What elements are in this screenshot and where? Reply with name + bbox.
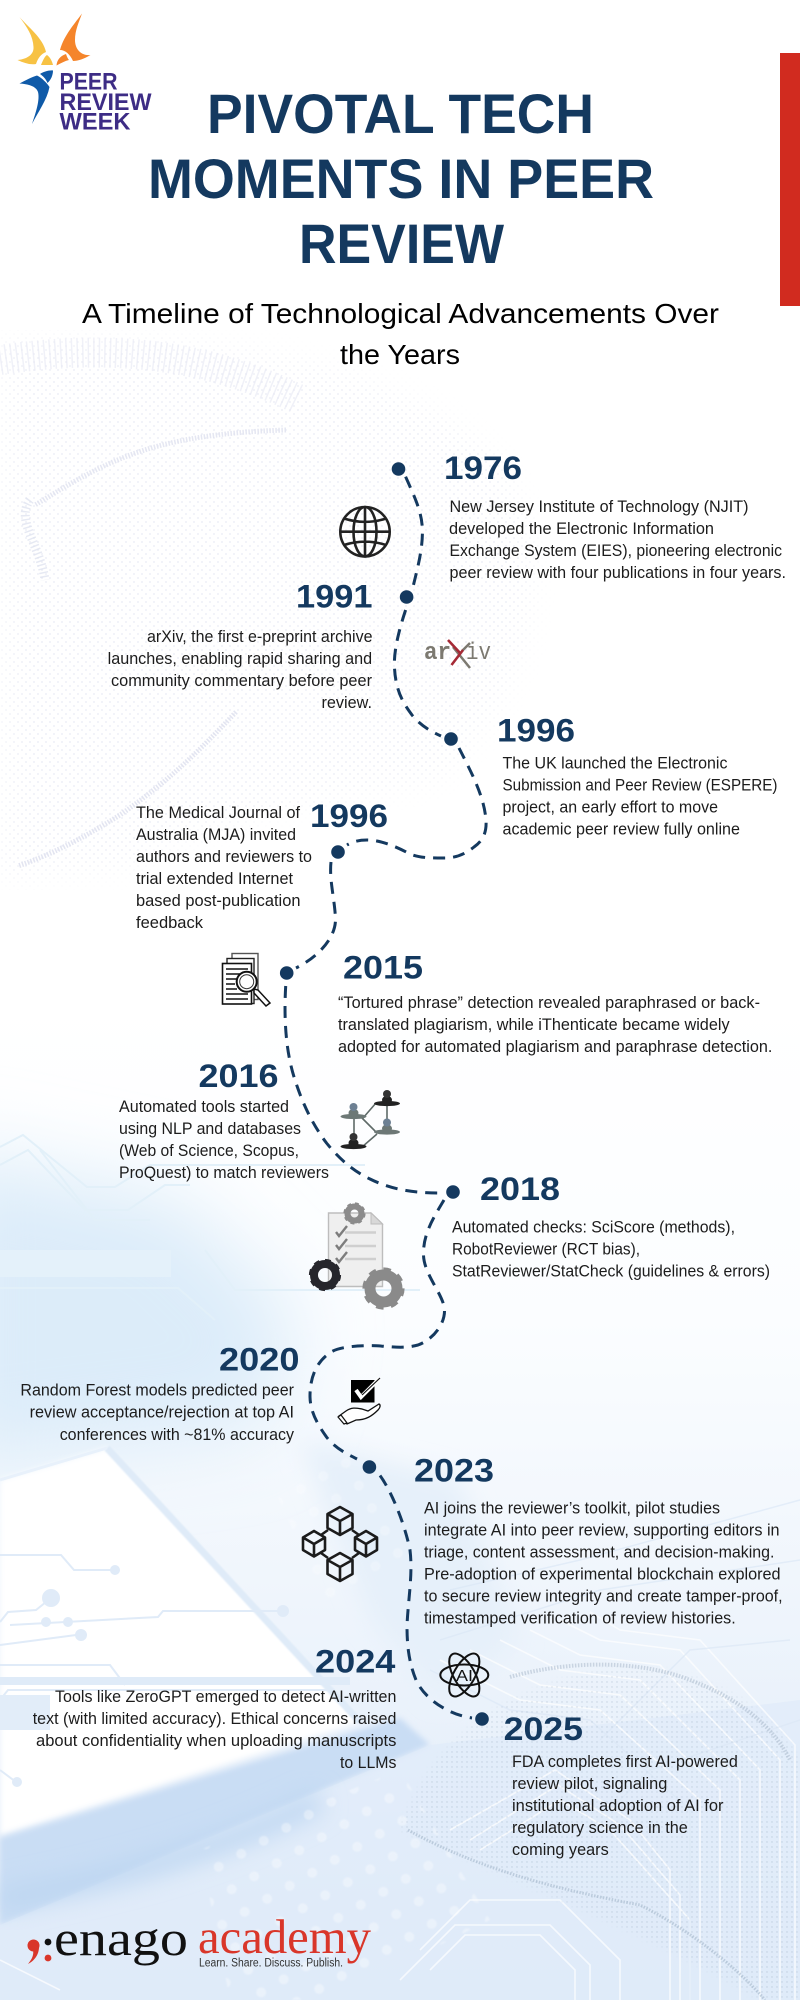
description 2016 xyxy=(119,1098,329,1182)
description 1991: launches, enabling rapid sharing and xyxy=(108,650,372,668)
year 2024: 2024 xyxy=(315,1644,396,1680)
description 2025: regulatory science in the xyxy=(512,1819,688,1837)
description 2018: Automated checks: SciScore (methods), xyxy=(452,1219,735,1237)
icon: blockchain cubes xyxy=(303,1507,377,1581)
description 1996 MJA: The Medical Journal of xyxy=(136,804,300,822)
description 2024: about confidentiality when uploading manuscripts xyxy=(36,1732,396,1750)
panel: 1991 xyxy=(108,579,372,712)
year 1996: 1996 xyxy=(497,713,575,749)
panel: 2020 xyxy=(20,1342,300,1444)
year 2015: 2015 xyxy=(343,950,423,986)
description 2015: translated plagiarism, while iThenticate became widely xyxy=(338,1016,730,1034)
icon: arXiv logo: ar xyxy=(424,640,451,667)
subtitle xyxy=(82,298,719,370)
icon: AI atom: AI xyxy=(456,1668,473,1685)
description 2023: AI joins the reviewer’s toolkit, pilot studies xyxy=(424,1500,720,1518)
description 2016: using NLP and databases xyxy=(119,1120,301,1138)
description 2023: integrate AI into peer review, supporting editors in xyxy=(424,1522,780,1540)
logo semicolon mark xyxy=(28,1939,51,1964)
year 1996: 1996 xyxy=(310,798,388,834)
panel: 2025 xyxy=(504,1711,738,1859)
logo: Peer Review Week xyxy=(18,14,152,136)
description 2015: “Tortured phrase” detection revealed paraphrased or back- xyxy=(338,994,760,1012)
year 1976: 1976 xyxy=(444,450,522,486)
description 1991: community commentary before peer xyxy=(111,672,372,690)
description 1996 UK: The UK launched the Electronic xyxy=(502,755,728,773)
dotted wave pattern xyxy=(0,330,560,890)
panel: 2023 xyxy=(414,1453,783,1628)
description 1976: peer review with four publications in four years. xyxy=(450,564,786,582)
icon: checkbox on open hand xyxy=(338,1378,380,1424)
description 2018 xyxy=(452,1219,770,1281)
academy wordmark: academy xyxy=(198,1909,371,1964)
description 2023 xyxy=(424,1500,783,1628)
description 1976: Exchange System (EIES), pioneering electronic xyxy=(450,542,782,560)
description 2024 xyxy=(33,1688,396,1772)
icon: globe xyxy=(340,507,390,556)
description 1996 MJA: Australia (MJA) invited xyxy=(136,826,296,844)
description 1996 UK: academic peer review fully online xyxy=(502,821,740,839)
description 2025: institutional adoption of AI for xyxy=(512,1797,724,1815)
description 2018: StatReviewer/StatCheck (guidelines & errors) xyxy=(452,1263,770,1281)
logo wordmark: WEEK xyxy=(60,108,131,136)
icon: documents with magnifier xyxy=(222,954,270,1006)
description 2020 xyxy=(20,1382,295,1444)
description 2025 xyxy=(512,1753,738,1859)
description 1996 UK: project, an early effort to move xyxy=(502,799,718,817)
timeline dots xyxy=(280,462,489,1726)
description 1996 MJA: based post-publication xyxy=(136,892,300,910)
description 1996 MJA: feedback xyxy=(136,914,204,932)
icon: arXiv logo: iv xyxy=(466,640,491,667)
icon: reviewer network xyxy=(340,1090,400,1149)
description 2024: Tools like ZeroGPT emerged to detect AI-written xyxy=(55,1688,396,1706)
description 2024: to LLMs xyxy=(340,1754,396,1772)
description 2023: triage, content assessment, and decision-making. xyxy=(424,1544,774,1562)
description 1996 MJA xyxy=(136,804,312,932)
panel: 2016 xyxy=(119,1058,329,1182)
soft blue tint, left side xyxy=(0,1150,300,1470)
enago wordmark: enago xyxy=(54,1910,188,1966)
circuit board lines, upper left xyxy=(0,1135,420,1320)
description 2025: FDA completes first AI-powered xyxy=(512,1753,738,1771)
description 1996 MJA: authors and reviewers to xyxy=(136,848,312,866)
description 2025: review pilot, signaling xyxy=(512,1775,667,1793)
logo wordmark: REVIEW xyxy=(60,89,152,116)
red accent bar xyxy=(780,53,800,306)
description 2020: Random Forest models predicted peer xyxy=(20,1382,294,1400)
panel: 2024 xyxy=(33,1644,396,1772)
year 2016: 2016 xyxy=(198,1058,278,1094)
title xyxy=(148,82,654,275)
description 1976: developed the Electronic Information xyxy=(449,520,714,538)
circuit lines, lower right xyxy=(0,1612,795,2000)
title: MOMENTS IN PEER xyxy=(148,147,654,210)
year 1991: 1991 xyxy=(296,579,372,615)
description 1991 xyxy=(108,628,372,712)
year 2018: 2018 xyxy=(480,1171,560,1207)
circuit lines in chip xyxy=(0,1555,330,1786)
description 2016: ProQuest) to match reviewers xyxy=(119,1164,329,1182)
white blob array on circuit board xyxy=(200,1770,490,2000)
description 1991: arXiv, the first e-preprint archive xyxy=(147,628,372,646)
description 2024: text (with limited accuracy). Ethical concerns raised xyxy=(33,1710,396,1728)
description 2025: coming years xyxy=(512,1841,609,1859)
description 2016: (Web of Science, Scopus, xyxy=(119,1142,299,1160)
logo flames and figure mark xyxy=(18,14,90,124)
title: REVIEW xyxy=(299,212,504,275)
description 2020: review acceptance/rejection at top AI xyxy=(30,1404,294,1422)
year 2023: 2023 xyxy=(414,1453,494,1489)
year 2020: 2020 xyxy=(219,1342,300,1378)
icon: arXiv logo xyxy=(424,640,491,668)
subtitle: the Years xyxy=(340,339,460,370)
description 1976: New Jersey Institute of Technology (NJIT) xyxy=(450,498,748,516)
description 1996 MJA: trial extended Internet xyxy=(136,870,293,888)
icon: checklist with gears xyxy=(311,1204,402,1307)
tagline: Learn. Share. Discuss. Publish. xyxy=(199,1958,343,1970)
description 1976 xyxy=(449,498,786,582)
title: PIVOTAL TECH xyxy=(207,82,594,145)
description 1996 UK xyxy=(502,755,778,839)
panel: 2015 xyxy=(338,950,772,1056)
logo wordmark xyxy=(60,68,152,136)
panel: 1996 UK ESPERE xyxy=(497,713,778,839)
icon: AI atom xyxy=(440,1649,488,1701)
description 1996 UK: Submission and Peer Review (ESPERE) xyxy=(502,777,778,795)
tilted chip edges xyxy=(0,1448,360,1835)
dashed timeline path xyxy=(285,477,486,1718)
dotted globe pattern, lower right xyxy=(400,1660,800,2000)
panel: 2018 xyxy=(452,1171,770,1281)
year 2025: 2025 xyxy=(504,1711,583,1747)
description 2020: conferences with ~81% accuracy xyxy=(60,1426,295,1444)
description 2023: timestamped verification of review histories. xyxy=(424,1610,736,1628)
description 2016: Automated tools started xyxy=(119,1098,289,1116)
panel: 1996 MJA xyxy=(136,798,388,932)
description 2015: adopted for automated plagiarism and paraphrase detection. xyxy=(338,1038,772,1056)
subtitle: A Timeline of Technological Advancements Over xyxy=(82,298,719,329)
description 2018: RobotReviewer (RCT bias), xyxy=(452,1241,640,1259)
description 2023: to secure review integrity and create tamper-proof, xyxy=(424,1588,783,1606)
logo: enago academy xyxy=(28,1909,371,1970)
description 1991: review. xyxy=(322,694,372,712)
panel: 1976 xyxy=(444,450,786,582)
description 2023: Pre-adoption of experimental blockchain explored xyxy=(424,1566,781,1584)
description 2015 xyxy=(338,994,772,1056)
logo wordmark: PEER xyxy=(60,68,118,96)
